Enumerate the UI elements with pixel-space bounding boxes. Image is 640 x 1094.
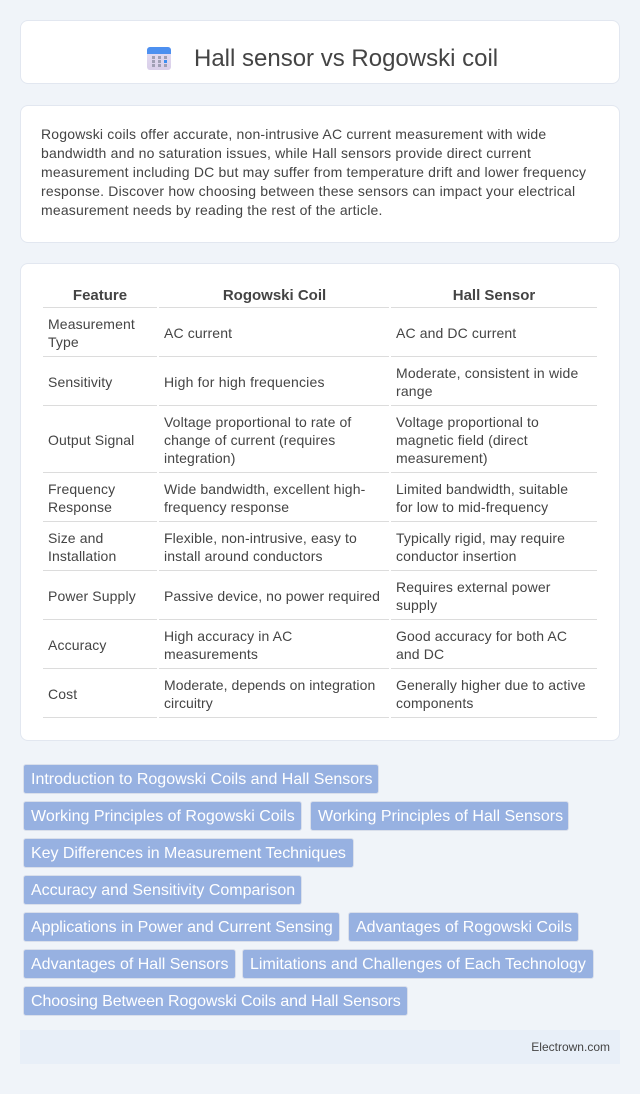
row: size and installation: conductor insertion: [396, 548, 517, 564]
row: frequency response: Limited bandwidth, suitable: [396, 481, 568, 497]
row: measurement type: Measurement: [48, 316, 135, 332]
icon: calendar: [147, 47, 171, 70]
row: cost: [48, 677, 586, 711]
tag: Working Principles of Hall Sensors: [318, 808, 563, 825]
row: size and installation: Flexible, non-intrusive, easy to: [164, 530, 357, 546]
tag: [23, 764, 379, 794]
row: size and installation: [48, 530, 565, 564]
footer credit: Electrown.com: [531, 1040, 610, 1054]
row: power supply: Passive device, no power required: [164, 588, 380, 604]
row: accuracy: High accuracy in AC: [164, 628, 292, 644]
tag: [23, 838, 354, 868]
row: power supply: Requires external power: [396, 579, 551, 595]
tag: [348, 912, 579, 942]
intro text: measurement needs by reading the rest of the article.: [41, 202, 383, 218]
tag: [23, 912, 340, 942]
row: cost: Cost: [48, 686, 77, 702]
tag: [23, 949, 236, 979]
row: frequency response: frequency response: [164, 499, 289, 515]
tag: [23, 875, 302, 905]
row: output signal: Voltage proportional to: [396, 414, 539, 430]
intro text: response. Discover how choosing between these sensors can impact your electrical: [41, 183, 575, 199]
row: output signal: Voltage proportional to rate of: [164, 414, 351, 430]
row: frequency response: for low to mid-frequency: [396, 499, 548, 515]
comparison table panel: [20, 263, 620, 741]
row: frequency response: Wide bandwidth, excellent high-: [164, 481, 365, 497]
intro text: bandwidth and no saturation issues, while Hall sensors provide direct current: [41, 145, 531, 161]
row: frequency response: Response: [48, 499, 112, 515]
row: measurement type: Type: [48, 334, 79, 350]
row: size and installation: Size and: [48, 530, 103, 546]
row: measurement type: [48, 316, 516, 350]
intro text: measurement including DC but may suffer from temperature drift and lower frequency: [41, 164, 586, 180]
row: size and installation: Installation: [48, 548, 116, 564]
tag: Advantages of Hall Sensors: [31, 956, 228, 973]
row: size and installation: Typically rigid, may require: [396, 530, 565, 546]
comparison table: [43, 287, 597, 718]
title: Hall sensor vs Rogowski coil: [194, 45, 498, 72]
row: cost: Generally higher due to active: [396, 677, 586, 693]
tag: [242, 949, 594, 979]
row: power supply: [48, 579, 551, 613]
row: accuracy: [48, 628, 567, 662]
row: sensitivity: Sensitivity: [48, 374, 112, 390]
intro text: [41, 126, 586, 218]
tag: Applications in Power and Current Sensing: [31, 919, 333, 936]
row: sensitivity: Moderate, consistent in wide: [396, 365, 578, 381]
tag: [23, 986, 408, 1016]
row: measurement type: AC and DC current: [396, 325, 516, 341]
row: output signal: Output Signal: [48, 432, 134, 448]
tag: Choosing Between Rogowski Coils and Hall Sensors: [31, 993, 401, 1010]
row: output signal: [48, 414, 539, 466]
row: output signal: change of current (requires: [164, 432, 335, 448]
row: frequency response: [48, 481, 568, 515]
intro text: Rogowski coils offer accurate, non-intrusive AC current measurement with wide: [41, 126, 546, 142]
row: measurement type: AC current: [164, 325, 232, 341]
tag: [23, 801, 302, 831]
row: accuracy: measurements: [164, 646, 258, 662]
tag: Limitations and Challenges of Each Technology: [250, 956, 586, 973]
row: accuracy: and DC: [396, 646, 444, 662]
row: accuracy: Accuracy: [48, 637, 107, 653]
table header: Feature: [73, 287, 127, 304]
intro panel: [20, 105, 620, 243]
row: output signal: magnetic field (direct: [396, 432, 528, 448]
tag: Advantages of Rogowski Coils: [356, 919, 572, 936]
topic tags: [23, 764, 594, 1016]
table header: Hall Sensor: [453, 287, 535, 304]
row: cost: Moderate, depends on integration: [164, 677, 375, 693]
row: output signal: measurement): [396, 450, 488, 466]
row: size and installation: install around conductors: [164, 548, 323, 564]
row: frequency response: Frequency: [48, 481, 115, 497]
footer: [20, 1030, 620, 1064]
row: accuracy: Good accuracy for both AC: [396, 628, 567, 644]
header panel: [20, 20, 620, 84]
row: output signal: integration): [164, 450, 235, 466]
table header: Rogowski Coil: [223, 287, 326, 304]
tag: Key Differences in Measurement Techniques: [31, 845, 346, 862]
row: sensitivity: range: [396, 383, 433, 399]
table header: [73, 287, 535, 304]
row: cost: components: [396, 695, 473, 711]
row: sensitivity: High for high frequencies: [164, 374, 325, 390]
row: power supply: supply: [396, 597, 437, 613]
row: sensitivity: [48, 365, 578, 399]
tag: [310, 801, 569, 831]
tag: Accuracy and Sensitivity Comparison: [31, 882, 295, 899]
row: cost: circuitry: [164, 695, 213, 711]
tag: Working Principles of Rogowski Coils: [31, 808, 295, 825]
tag: Introduction to Rogowski Coils and Hall Sensors: [31, 771, 372, 788]
row: power supply: Power Supply: [48, 588, 136, 604]
